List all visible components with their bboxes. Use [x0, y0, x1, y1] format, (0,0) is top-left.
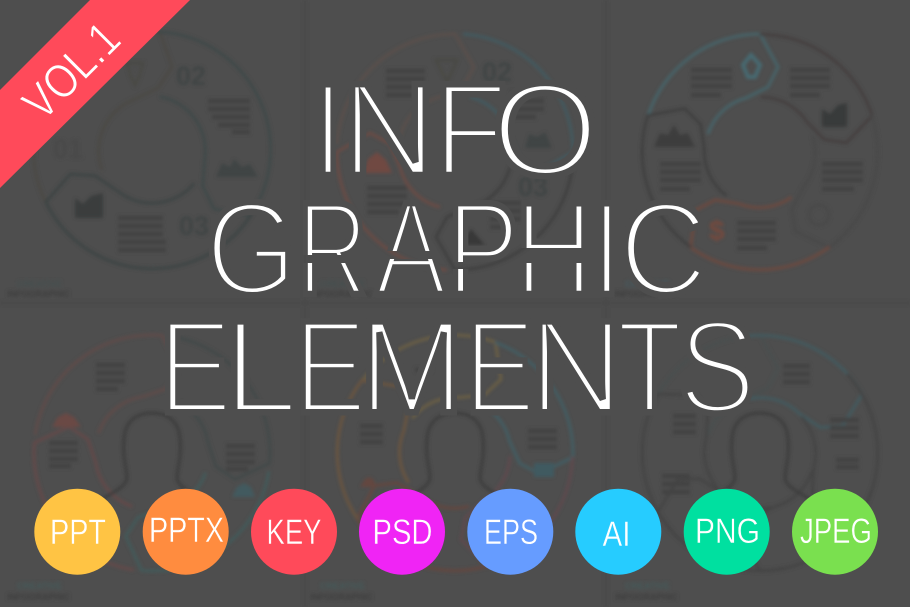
- panel: preview 2: [310, 34, 573, 299]
- number 01: 01: [53, 134, 83, 164]
- number 03: 03: [518, 172, 548, 202]
- icon: people: [525, 132, 552, 148]
- icon: chart: [75, 193, 103, 218]
- caption: INFOGRAPHIC: [615, 592, 679, 602]
- number 02: 02: [176, 61, 206, 91]
- letter F: F: [433, 55, 507, 203]
- icon: chart: [822, 103, 847, 127]
- badge: AI: AI: [602, 515, 630, 554]
- caption: INFOGRAPHIC: [614, 289, 678, 299]
- caption: [7, 581, 71, 602]
- title line: ELEMENTS: E: [159, 292, 232, 441]
- caption: CREATIVE: [17, 279, 62, 289]
- icon: people: [216, 159, 258, 177]
- icon: teal people: [232, 483, 255, 497]
- badge: EPS: EPS: [484, 513, 538, 552]
- badge: PNG: PNG: [695, 512, 760, 551]
- number 03: 03: [179, 211, 209, 241]
- head silhouette: [390, 413, 520, 508]
- caption: INFOGRAPHIC: [310, 289, 374, 299]
- badge: JPEG: JPEG: [800, 512, 872, 551]
- caption: [615, 581, 679, 602]
- letter H: H: [515, 175, 593, 323]
- panel: preview 5: [293, 304, 595, 607]
- head silhouette: [695, 413, 825, 508]
- caption: INFOGRAPHIC: [7, 592, 71, 602]
- icon: bulb: [436, 60, 457, 82]
- caption: CREATIVE: [320, 581, 365, 591]
- preview text blocks: [49, 365, 255, 469]
- letter N: N: [341, 56, 437, 203]
- badge: PSD: PSD: [372, 513, 432, 552]
- letter A: A: [375, 175, 446, 323]
- letter R: R: [297, 174, 367, 323]
- panel: preview 4: [7, 325, 280, 602]
- head silhouette: [87, 413, 217, 508]
- caption: [7, 279, 71, 299]
- corner ribbon: [0, 0, 190, 188]
- panel: preview 3: [613, 9, 910, 313]
- badge: PPTX: PPTX: [149, 511, 224, 550]
- caption: [614, 279, 678, 299]
- letter T: T: [617, 294, 682, 441]
- badge: KEY: KEY: [266, 513, 322, 552]
- preview text blocks: [662, 366, 859, 492]
- caption: INFOGRAPHIC: [7, 289, 71, 299]
- letter I: I: [592, 175, 622, 322]
- badge: EPS: [467, 489, 553, 575]
- title line: GRAPHIC: G: [206, 176, 297, 323]
- icon: bulb: [743, 55, 760, 77]
- icon: gear: [809, 205, 829, 225]
- letter P: P: [447, 174, 519, 322]
- number 02: 02: [482, 57, 512, 87]
- icon: teal chart: [534, 463, 554, 477]
- preview text blocks: [118, 101, 250, 250]
- badge: KEY: [251, 489, 337, 575]
- title line: INFO: I: [313, 56, 343, 203]
- badge: PPTX: [143, 489, 229, 575]
- badge: PNG: [684, 489, 770, 575]
- letter E: E: [465, 294, 535, 441]
- icon: bulb: [127, 63, 143, 85]
- icon: red people: [360, 477, 377, 487]
- caption: INFOGRAPHIC: [310, 592, 374, 602]
- caption: CREATIVE: [320, 279, 365, 289]
- letter N: N: [528, 293, 624, 440]
- caption: [310, 279, 374, 299]
- panel: preview 1: [7, 17, 314, 312]
- letter L: L: [223, 293, 298, 441]
- letter S: S: [679, 294, 755, 441]
- badge: JPEG: [792, 489, 878, 575]
- badge: PSD: [359, 489, 445, 575]
- caption: CREATIVE: [625, 279, 670, 289]
- icon: people: [654, 125, 695, 147]
- format badges: [34, 489, 878, 575]
- letter M: M: [359, 294, 464, 441]
- panel: preview 6: [602, 297, 910, 607]
- preview text blocks: [367, 71, 544, 227]
- caption: [310, 581, 374, 602]
- badge: AI: [575, 489, 661, 575]
- letter O: O: [492, 56, 599, 203]
- caption: CREATIVE: [17, 581, 62, 591]
- badge: PPT: PPT: [50, 513, 106, 552]
- badge: PPT: [34, 489, 120, 575]
- letter E: E: [294, 293, 366, 441]
- icon: dark image: [459, 229, 485, 245]
- ribbon label: VOL.1: [13, 12, 131, 130]
- preview text blocks: [360, 370, 557, 447]
- title: [165, 80, 750, 416]
- icon: dollar: $: [709, 215, 725, 246]
- letter C: C: [619, 176, 708, 323]
- icon: red people: [52, 413, 81, 427]
- preview text blocks: [660, 70, 863, 248]
- ribbon band: [0, 0, 190, 188]
- icon: red people: [363, 152, 392, 173]
- caption: CREATIVE: [625, 581, 670, 591]
